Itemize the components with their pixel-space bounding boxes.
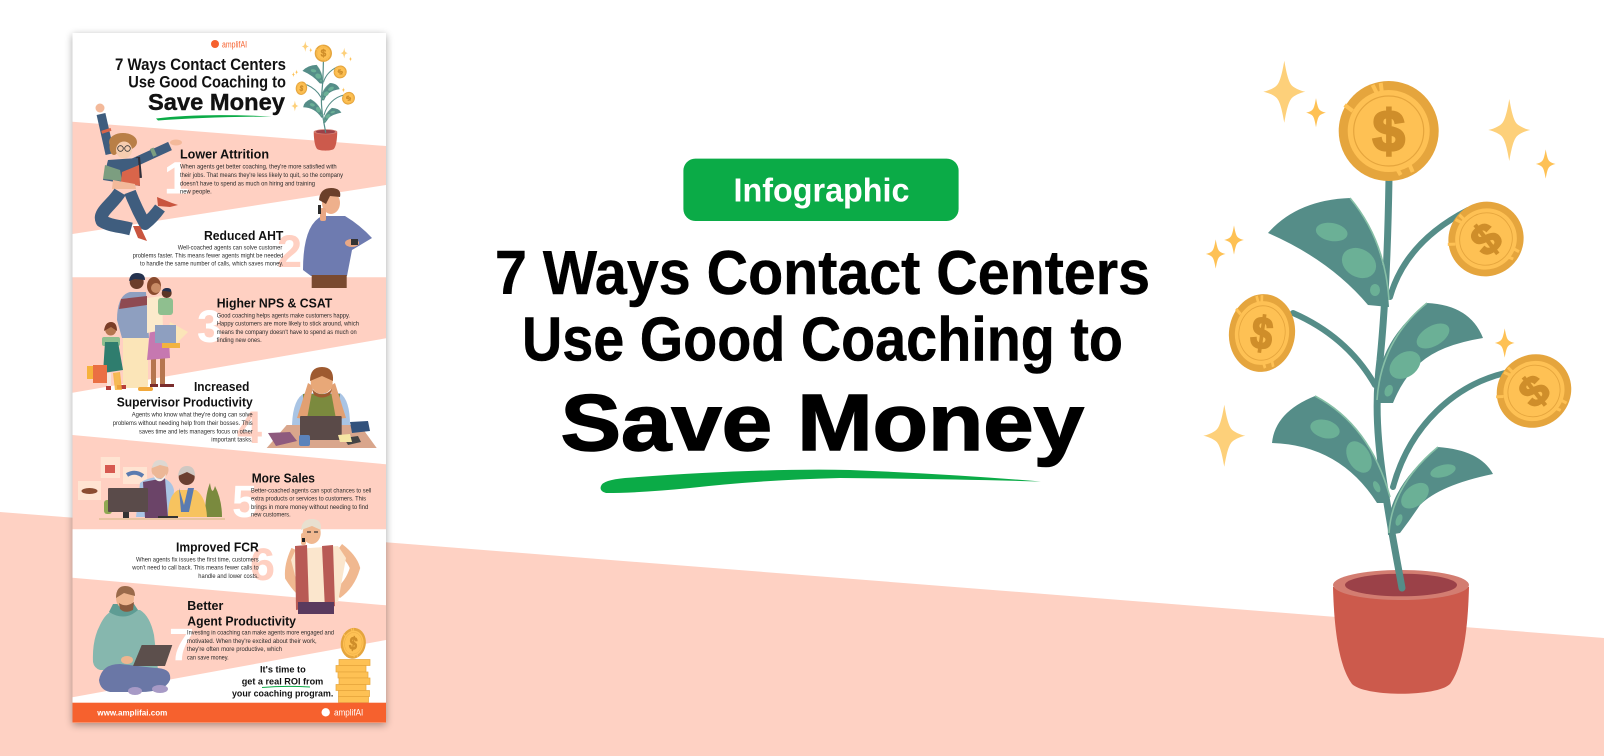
section 7: better agent productivity xyxy=(169,598,334,670)
icon: mini money plant: $ xyxy=(344,93,354,103)
main title: Save Money xyxy=(561,378,1085,467)
callout: real ROI xyxy=(232,664,333,700)
badge: Infographic: Infographic xyxy=(734,172,910,208)
section 1: lower attrition: doesn't have to spend as much on hiring and training xyxy=(180,181,315,187)
section 7: better agent productivity: motivated. When they're excited about their work, xyxy=(187,639,317,645)
section 1: lower attrition: Lower Attrition xyxy=(180,146,269,161)
section 7: better agent productivity: Agent Productivity xyxy=(187,613,297,628)
section 1: lower attrition: When agents get better coaching, they're more satisfied with xyxy=(180,165,337,171)
illustration: stressed man at desk xyxy=(267,367,377,448)
badge: Infographic xyxy=(683,159,959,221)
section 4: increased supervisor productivity: Agents who know what they're doing can solve xyxy=(132,413,253,419)
coin: lower right xyxy=(1482,339,1586,443)
coin: lower right: $ xyxy=(1510,366,1559,418)
section 5: more sales: Better-coached agents can spot chances to sell xyxy=(251,488,371,494)
section 1: lower attrition xyxy=(164,146,343,204)
section 4: increased supervisor productivity: 4 xyxy=(237,402,262,453)
icon: coin stack: $ xyxy=(348,634,359,654)
section 7: better agent productivity: Investing in coaching can make agents more engaged and xyxy=(187,631,334,637)
section 4: increased supervisor productivity: Increased xyxy=(194,379,249,394)
section 3: higher nps and csat: 3 xyxy=(197,301,222,352)
section 1: lower attrition: 1 xyxy=(164,152,189,204)
illustration: man on phone xyxy=(303,188,372,288)
logo: amplifAI top: amplifAI xyxy=(222,40,247,50)
illustration: money plant with coins xyxy=(1203,61,1586,694)
section 3: higher nps and csat: Good coaching helps agents make customers happy. xyxy=(217,313,350,319)
section 4: increased supervisor productivity: saves time and lets managers focus on other xyxy=(139,429,253,435)
illustration: family shopping xyxy=(87,273,188,391)
section 2: reduced aht: Well-coached agents can solve customer xyxy=(178,245,282,251)
poster title: Save Money xyxy=(148,89,285,115)
section 2: reduced aht: 2 xyxy=(277,226,302,277)
footer bar: www.amplifai.com xyxy=(96,707,168,717)
section 5: more sales xyxy=(232,470,371,527)
callout: real ROI: It's time to xyxy=(260,664,306,675)
callout: real ROI: get a real ROI from xyxy=(242,676,323,687)
illustration: older woman on phone xyxy=(290,519,355,614)
icon: mini money plant: $ xyxy=(336,67,345,77)
section 6: improved fcr: 6 xyxy=(250,539,275,590)
main title: 7 Ways Contact Centers xyxy=(495,239,1150,308)
icon: coin stack xyxy=(336,626,370,702)
coin: top xyxy=(1339,81,1439,181)
section 7: better agent productivity: can save money. xyxy=(187,655,229,661)
poster title: 7 Ways Contact Centers xyxy=(115,56,286,74)
section 3: higher nps and csat xyxy=(197,296,359,352)
section 6: improved fcr: When agents fix issues the first time, customers xyxy=(136,558,259,564)
section 4: increased supervisor productivity: Supervisor Productivity xyxy=(117,395,253,410)
panel: infographic poster xyxy=(72,33,386,725)
coin: left: $ xyxy=(1248,306,1276,360)
icon: mini money plant: $ xyxy=(321,49,327,60)
section 6: improved fcr xyxy=(131,539,275,590)
illustration: jumping woman xyxy=(96,104,182,241)
main title: Use Good Coaching to xyxy=(522,306,1123,374)
coin: top: $ xyxy=(1373,99,1405,164)
section 6: improved fcr: won't need to call back. This means fewer calls to xyxy=(131,566,259,572)
section 4: increased supervisor productivity: important tasks. xyxy=(211,437,253,443)
section 6: improved fcr: handle and lower costs. xyxy=(198,574,259,580)
illustration: man with laptop xyxy=(93,586,172,695)
coin: right xyxy=(1433,186,1539,292)
section 7: better agent productivity: Better xyxy=(187,598,223,613)
section 3: higher nps and csat: Happy customers are more likely to stick around, which xyxy=(217,322,359,328)
callout: real ROI: your coaching program. xyxy=(232,689,333,700)
section 4: increased supervisor productivity xyxy=(113,379,262,453)
icon: mini money plant: $ xyxy=(299,83,304,93)
section 2: reduced aht: Reduced AHT xyxy=(204,228,283,243)
section 7: better agent productivity: they're often more productive, which xyxy=(187,647,282,653)
section 7: better agent productivity: 7 xyxy=(169,619,194,670)
poster title xyxy=(115,56,286,120)
section 1: lower attrition: their jobs. That means they're less likely to quit, so the company xyxy=(180,173,343,179)
main title xyxy=(495,239,1150,493)
section 5: more sales: brings in more money without needing to find xyxy=(251,505,368,511)
footer bar: amplifAI xyxy=(334,708,363,718)
section 4: increased supervisor productivity: problems without needing help from their bosses. This xyxy=(113,421,253,427)
section 5: more sales: new customers. xyxy=(251,513,291,519)
green brush underline xyxy=(601,470,1041,493)
coin: left xyxy=(1224,290,1300,376)
section 3: higher nps and csat: finding new ones. xyxy=(217,338,262,344)
background floor band xyxy=(0,512,1604,756)
section 5: more sales: More Sales xyxy=(252,470,315,485)
section 6: improved fcr: Improved FCR xyxy=(176,540,259,555)
section 5: more sales: extra products or services to customers. This xyxy=(251,497,366,503)
illustration: seniors shopping online xyxy=(78,457,225,520)
section 1: lower attrition: new people. xyxy=(180,189,212,195)
section 3: higher nps and csat: Higher NPS & CSAT xyxy=(217,296,332,311)
section 2: reduced aht: problems faster. This means fewer agents might be needed xyxy=(133,253,283,259)
coin: right: $ xyxy=(1462,214,1511,266)
section 5: more sales: 5 xyxy=(232,476,257,527)
section 2: reduced aht xyxy=(133,226,302,277)
icon: mini money plant xyxy=(291,41,357,151)
footer bar xyxy=(72,703,386,723)
logo: amplifAI top xyxy=(211,40,247,50)
section 3: higher nps and csat: means the company doesn't have to spend as much on xyxy=(217,330,357,336)
section 2: reduced aht: to handle the same number of calls, which saves money. xyxy=(140,262,284,268)
poster title: Use Good Coaching to xyxy=(128,73,286,91)
